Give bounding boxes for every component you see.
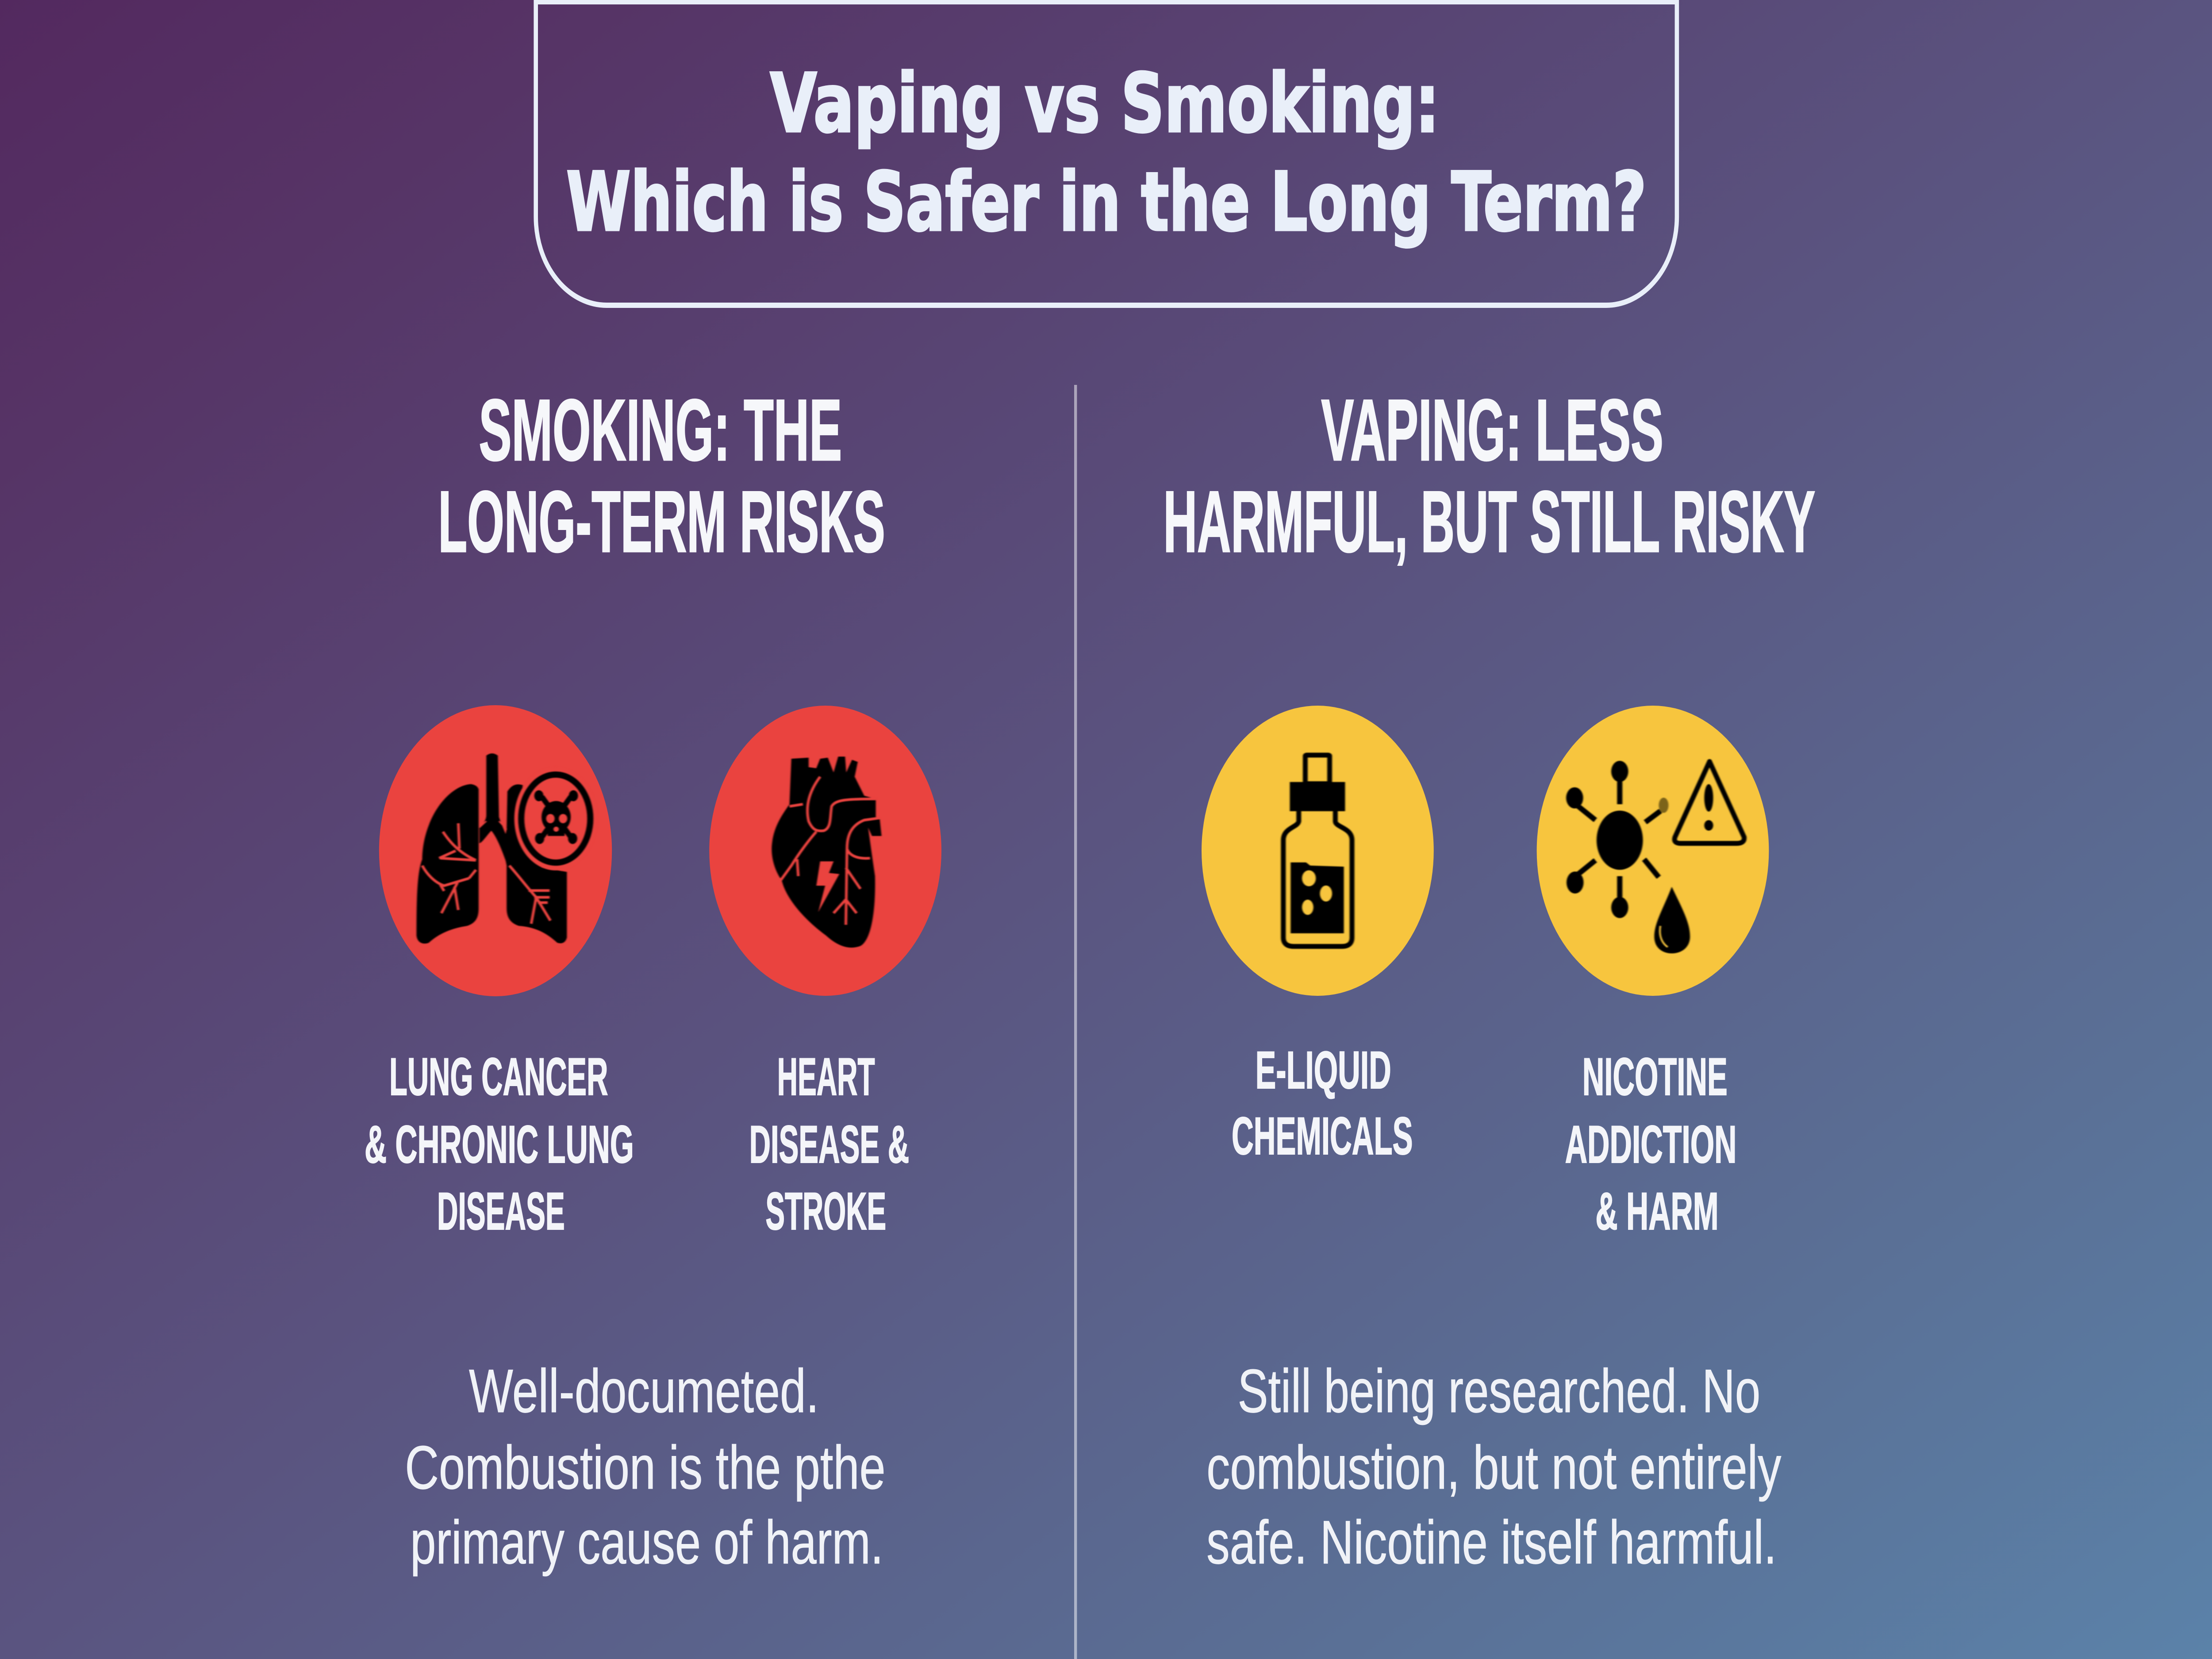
label: nicotine addiction: NICOTINE — [1582, 1048, 1728, 1107]
text: smoking summary: primary cause of harm. — [410, 1508, 883, 1577]
text: smoking summary: Well-documeted. — [469, 1356, 819, 1425]
title outline — [536, 2, 1677, 305]
label: heart disease: STROKE — [765, 1182, 886, 1241]
heading: smoking — [438, 381, 885, 570]
title text: Which is Safer in the Long Term? — [566, 155, 1647, 250]
label: e-liquid chemicals: E-LIQUID — [1256, 1041, 1391, 1100]
label: nicotine addiction — [1565, 1048, 1737, 1241]
label: lung cancer: LUNG CANCER — [389, 1048, 608, 1107]
title panel — [536, 2, 1677, 305]
text: smoking summary: Combustion is the pthe — [405, 1433, 886, 1502]
label: heart disease — [749, 1048, 909, 1241]
heading: smoking: LONG-TERM RISKS — [438, 473, 885, 570]
text: vaping summary — [1206, 1356, 1781, 1577]
icon: nicotine molecule, warning and drop in yellow circle — [1537, 706, 1769, 996]
title text: Vaping vs Smoking: — [770, 57, 1440, 151]
icon: e-liquid bottle in yellow circle — [1202, 706, 1434, 996]
panel: smoking — [365, 381, 941, 1577]
text: smoking summary — [405, 1356, 886, 1577]
label: lung cancer: & CHRONIC LUNG — [365, 1115, 634, 1175]
label: heart disease: DISEASE & — [749, 1115, 909, 1175]
label: e-liquid chemicals — [1232, 1041, 1413, 1166]
label: nicotine addiction: & HARM — [1595, 1182, 1719, 1241]
title text — [566, 57, 1647, 250]
text: vaping summary: combustion, but not entirely — [1206, 1433, 1781, 1502]
label: heart disease: HEART — [777, 1048, 875, 1107]
panel: vaping — [1164, 381, 1815, 1577]
center divider — [1074, 385, 1077, 1659]
label: e-liquid chemicals: CHEMICALS — [1232, 1107, 1413, 1166]
label: nicotine addiction: ADDICTION — [1565, 1115, 1737, 1175]
label: lung cancer — [365, 1048, 634, 1241]
label: lung cancer: DISEASE — [437, 1182, 565, 1241]
heading: vaping — [1164, 381, 1815, 570]
text: vaping summary: Still being researched. No — [1238, 1356, 1760, 1425]
heading: vaping: HARMFUL, BUT STILL RISKY — [1164, 473, 1815, 570]
text: vaping summary: safe. Nicotine itself harmful. — [1206, 1508, 1777, 1577]
icon: heart in red circle — [709, 706, 941, 996]
icon: lungs with skull in red circle — [379, 705, 612, 996]
heading: smoking: SMOKING: THE — [479, 381, 842, 479]
heading: vaping: VAPING: LESS — [1321, 381, 1663, 479]
